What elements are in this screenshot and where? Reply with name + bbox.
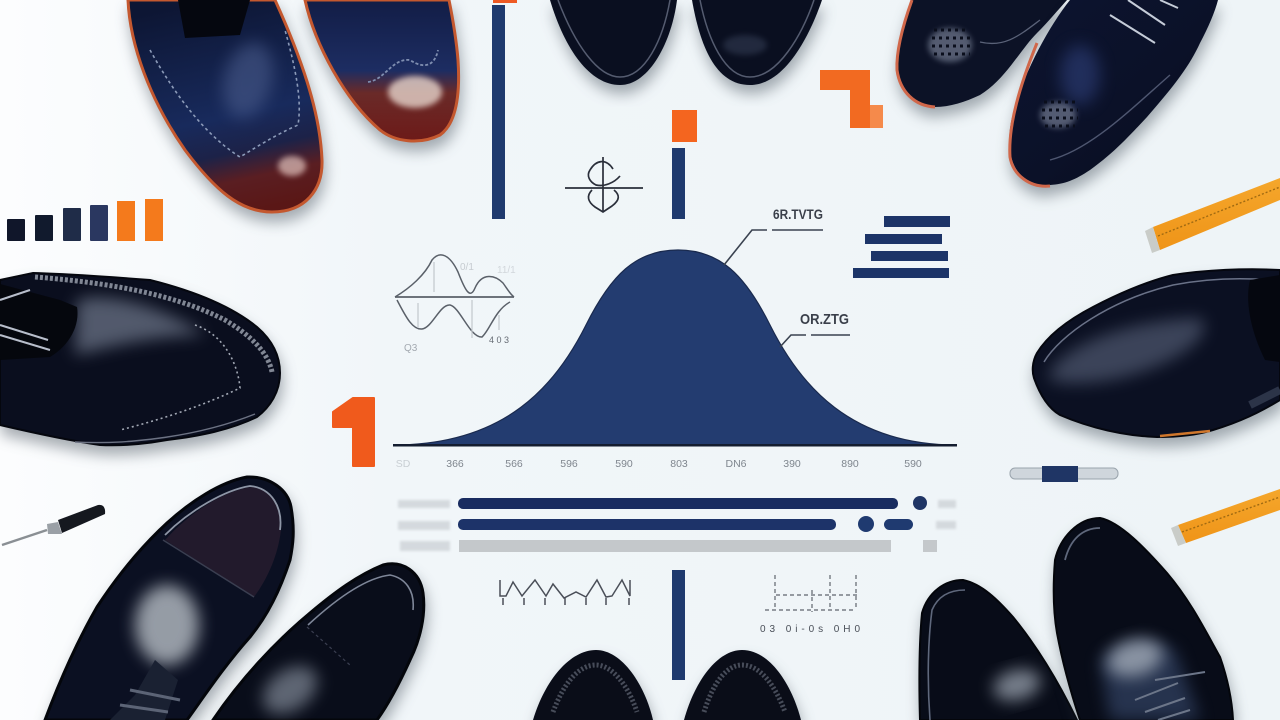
shoe: bottom-left second cap-toe <box>213 564 424 720</box>
shoe: top-center left <box>550 0 677 85</box>
callout: lower: OR.ZTG <box>800 311 849 328</box>
mini step chart: lower right <box>760 575 860 635</box>
shoe: top-left second wingtip <box>305 0 459 141</box>
shoe: bottom-right laced <box>1054 518 1233 720</box>
orange stepped shape: top right <box>820 70 883 128</box>
axis labels: 590 <box>615 458 633 470</box>
shoe: bottom-center right <box>684 650 801 720</box>
bell curve chart <box>393 250 957 446</box>
mini ticker chart: lower left <box>500 580 630 605</box>
wave chart labels: Q3 <box>404 343 418 354</box>
shoe: top-left wingtip <box>128 0 322 212</box>
axis labels: 366 <box>446 458 464 470</box>
axis labels: 566 <box>505 458 523 470</box>
axis labels: 590 <box>904 458 922 470</box>
ruler: lower right <box>1171 489 1280 546</box>
wave chart labels: 0/1 <box>460 262 474 273</box>
small pen: center right <box>1010 466 1118 482</box>
axis labels: DN6 <box>725 458 747 470</box>
small pen: lower left <box>2 505 105 545</box>
shoe: bottom-center left <box>533 650 653 720</box>
orange numeral shape: one <box>333 398 374 466</box>
horizontal comparison bars <box>398 496 956 552</box>
faint row labels <box>398 500 956 551</box>
orange marker block <box>672 110 697 142</box>
callout: upper <box>724 207 823 265</box>
mini step chart: lower right: 03 0i-0s 0H0 <box>760 624 860 635</box>
shoe: bottom-right plain <box>919 580 1077 720</box>
shoe: top-right brogue <box>897 0 1067 107</box>
vertical navy bar: bottom center <box>672 570 685 680</box>
callout: lower <box>780 311 850 347</box>
shoe: top-center right <box>692 0 822 85</box>
shoe: left-middle brogue <box>0 273 280 445</box>
axis labels: 390 <box>783 458 801 470</box>
wave chart labels <box>404 262 516 354</box>
vertical navy bar: top left <box>492 0 517 219</box>
wave chart labels: 4 0 3 <box>489 335 509 345</box>
ruler: upper right <box>1145 178 1280 253</box>
axis labels: SD <box>396 458 411 470</box>
wave chart labels: 11/1 <box>497 265 516 276</box>
callout: upper: 6R.TVTG <box>773 207 823 222</box>
shoe: right-middle plain <box>1033 269 1280 437</box>
icon: crosshair glyph <box>565 157 643 212</box>
axis labels <box>396 458 922 470</box>
axis labels: 890 <box>841 458 859 470</box>
horizontal navy bars: top right <box>853 216 950 278</box>
shoe: bottom-left cap-toe <box>45 477 293 720</box>
axis labels: 596 <box>560 458 578 470</box>
shoe: top-right second brogue <box>1009 0 1218 186</box>
axis labels: 803 <box>670 458 688 470</box>
vertical navy bar: top center <box>672 148 685 219</box>
small stepped bar chart: left <box>7 199 163 241</box>
mini wave chart <box>395 255 516 354</box>
